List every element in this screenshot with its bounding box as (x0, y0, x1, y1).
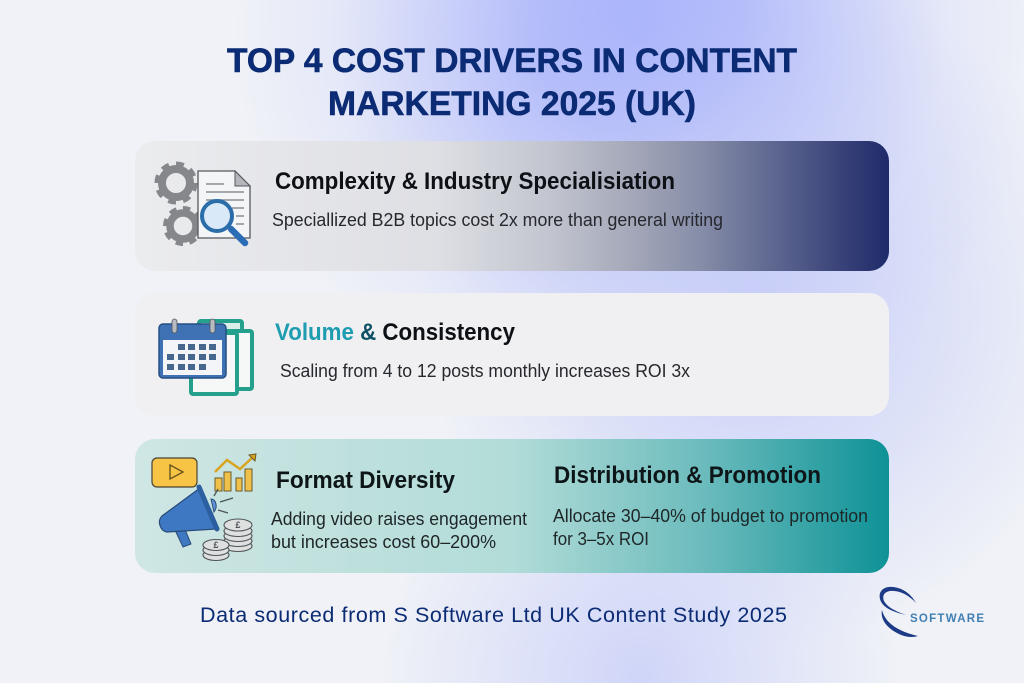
title: TOP 4 COST DRIVERS IN CONTENT (227, 42, 797, 80)
panel: format diversity and distribution (135, 439, 889, 573)
video icon (152, 458, 197, 487)
heading: format diversity: Format Diversity (276, 467, 456, 494)
panel: volume and consistency (135, 293, 889, 416)
pound coins: £ (213, 540, 219, 550)
pound coins (203, 519, 252, 560)
heading: Complexity & Industry Specialisiation (275, 168, 675, 195)
growth chart (215, 454, 256, 491)
description: Speciallized B2B topics cost 2x more than general writing (272, 209, 723, 230)
title (227, 42, 797, 123)
pound coins: £ (235, 520, 241, 530)
heading: distribution and promotion: Distribution & Promotion (554, 462, 821, 489)
calendar (159, 319, 226, 378)
heading: Volume & Consistency (275, 319, 516, 346)
document (198, 171, 250, 238)
magnifier (202, 201, 245, 243)
logo: S Software (880, 587, 984, 637)
description: format diversity (271, 509, 527, 552)
icon: calendar with stacked pages (159, 319, 252, 394)
title: MARKETING 2025 (UK) (328, 85, 696, 123)
logo swoosh (880, 587, 918, 637)
stacked pages (191, 321, 252, 394)
panel: complexity and industry specialisation (135, 141, 889, 271)
logo wordmark: SOFTWARE (910, 613, 984, 625)
description: format diversity: Adding video raises engagement (271, 509, 527, 529)
lower gear (165, 208, 201, 244)
description: distribution and promotion (553, 506, 868, 549)
description: format diversity: but increases cost 60–200% (271, 532, 496, 552)
upper gear (156, 164, 196, 202)
source note: Data sourced from S Software Ltd UK Content Study 2025 (200, 603, 787, 627)
description: distribution and promotion: for 3–5x ROI (553, 529, 649, 549)
icon: video, chart, megaphone and coins (152, 454, 256, 560)
description: Scaling from 4 to 12 posts monthly increases ROI 3x (280, 360, 691, 381)
megaphone (160, 487, 233, 547)
description: distribution and promotion: Allocate 30–40% of budget to promotion (553, 506, 868, 526)
icon: gears, document and magnifier (156, 164, 250, 244)
